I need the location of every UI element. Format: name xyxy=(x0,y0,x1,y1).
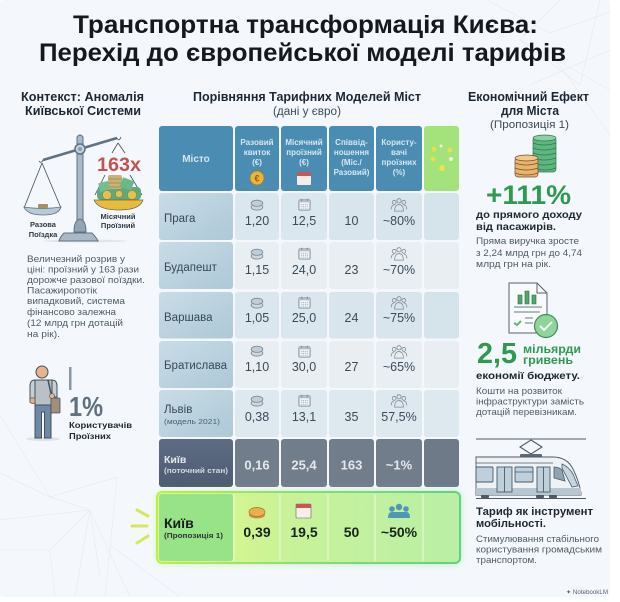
stat: +111%: Пряма виручка зросте xyxy=(476,236,579,247)
text block: context: випадковий, система xyxy=(27,296,126,307)
row: Warsaw: 1,05 xyxy=(245,311,269,325)
row: Budapest: Будапешт xyxy=(164,262,218,274)
stat: 2.5 billion: мільярди xyxy=(523,342,581,356)
row: Bratislava: 27 xyxy=(345,360,358,374)
stat: 2.5 billion xyxy=(476,338,584,418)
table header row: (€) xyxy=(299,158,309,167)
heading: context: Контекст: Аномалія xyxy=(21,90,144,104)
table header row: проїзних xyxy=(381,158,417,167)
text block: context: на рік). xyxy=(27,329,60,340)
row: Prague: 12,5 xyxy=(292,214,316,228)
row: Prague: ~80% xyxy=(383,214,415,228)
icon: scales with 163x: Місячний xyxy=(101,212,136,221)
table header row: Співвід- xyxy=(335,138,368,147)
table header row: Користу- xyxy=(381,138,417,147)
stat: +111%: від пасажирів. xyxy=(476,221,556,233)
table header row: проїзний xyxy=(286,148,322,157)
text block: context xyxy=(27,254,145,340)
heading: comparison xyxy=(193,90,421,118)
text block: mobility: мобільності. xyxy=(476,518,546,530)
table header row: вачі xyxy=(391,148,407,157)
row: Kyiv proposal: (Пропозиція 1) xyxy=(164,531,224,540)
icon: budget document xyxy=(509,283,558,338)
row: Kyiv proposal: ~50% xyxy=(381,524,418,540)
table header row xyxy=(159,126,459,191)
row: Kyiv current xyxy=(159,439,459,487)
table header row: ношення xyxy=(334,148,369,157)
stat: +111% xyxy=(476,180,582,270)
icon: scales with 163x: Поїздка xyxy=(29,230,58,239)
text block: mobility: Тариф як інструмент xyxy=(476,506,594,518)
table header row: € xyxy=(254,174,260,184)
text block: context: (12 млрд грн дотацій xyxy=(27,318,123,329)
stat: 2.5 billion: гривень xyxy=(523,353,573,367)
row: Warsaw: Варшава xyxy=(164,312,213,324)
stat: 2.5 billion: 2,5 xyxy=(477,338,517,370)
stat: 1 percent users: 1% xyxy=(69,391,103,422)
row: Warsaw xyxy=(159,292,459,338)
stat: 2.5 billion: інфраструктури замість xyxy=(476,396,584,408)
stat: 2.5 billion: економії бюджету. xyxy=(476,370,580,382)
row: Kyiv current: (поточний стан) xyxy=(164,466,229,475)
icon: scales with 163x xyxy=(24,135,143,242)
icon: commuter xyxy=(26,366,60,441)
heading: economic effect: для Міста xyxy=(501,104,560,118)
stat: +111%: млрд грн на рік. xyxy=(476,259,551,270)
row: Prague: Прага xyxy=(164,213,196,225)
row: Lviv xyxy=(159,390,459,437)
table header row: Разовий xyxy=(240,138,274,147)
table header row: (€) xyxy=(252,158,262,167)
row: Lviv: 0,38 xyxy=(245,410,269,424)
title xyxy=(39,11,566,67)
heading: economic effect: (Пропозиція 1) xyxy=(490,119,569,131)
stat: +111%: +111% xyxy=(486,180,571,210)
row: Lviv: 57,5% xyxy=(381,410,417,424)
icon: scales with 163x: Разова xyxy=(30,220,57,229)
row: Budapest: ~70% xyxy=(383,263,415,277)
heading: context: Київської Системи xyxy=(25,104,141,118)
heading: comparison: (дані у євро) xyxy=(273,106,341,118)
row: Bratislava: ~65% xyxy=(383,360,415,374)
watermark: ✦ NotebookLM xyxy=(566,589,608,596)
table header row: квиток xyxy=(244,148,271,157)
row: Bratislava xyxy=(159,341,459,388)
stat: 2.5 billion: дотацій перевізникам. xyxy=(476,407,577,418)
panel: comparison table xyxy=(132,90,460,563)
row: Kyiv proposal: 19,5 xyxy=(290,524,318,540)
table header row: (%) xyxy=(393,168,406,177)
stat: 1 percent users: Користувачів xyxy=(69,420,132,430)
text block: context: фінансово залежна xyxy=(27,307,117,318)
icon: coin stacks xyxy=(515,135,556,177)
text block: mobility: транспортом. xyxy=(476,555,537,566)
arrows: highlight rays xyxy=(132,510,148,543)
row: Prague: 10 xyxy=(345,214,358,228)
row: Lviv: (модель 2021) xyxy=(164,417,221,426)
icon: scales with 163x: 163x xyxy=(97,155,141,176)
table header row: Місто xyxy=(182,154,210,165)
row: Kyiv proposal: Київ xyxy=(164,515,194,531)
heading: economic effect xyxy=(468,90,589,131)
row: Prague xyxy=(159,193,459,240)
icon: scales with 163x: Проїзний xyxy=(101,221,135,230)
title: Перехід до європейської моделі тарифів xyxy=(39,39,566,67)
table header row: Разовий) xyxy=(334,168,370,177)
row: Budapest: 23 xyxy=(345,263,358,277)
stat: 1 percent users xyxy=(69,367,132,441)
row: Kyiv proposal xyxy=(157,492,460,563)
table header row: (Міс./ xyxy=(341,158,362,167)
row: Bratislava: Братислава xyxy=(164,360,228,372)
row: Kyiv current: ~1% xyxy=(386,458,413,472)
row: Kyiv current: 0,16 xyxy=(244,458,270,472)
text block: context: Пасажиропотік xyxy=(27,286,98,296)
stat: +111%: з 2,24 млрд грн до 4,74 xyxy=(476,248,582,259)
stat: 2.5 billion: Кошти на розвиток xyxy=(476,386,563,397)
row: Kyiv current: 25,4 xyxy=(291,458,317,472)
row: Kyiv current: 163 xyxy=(341,458,362,472)
row: Warsaw: 25,0 xyxy=(292,311,316,325)
row: Budapest: 24,0 xyxy=(292,263,316,277)
row: Kyiv current: Київ xyxy=(164,454,187,466)
row: Warsaw: 24 xyxy=(345,311,358,325)
row: Lviv: Львів xyxy=(164,404,192,416)
row: Prague: 1,20 xyxy=(245,214,269,228)
heading: context xyxy=(21,90,144,118)
row: Budapest xyxy=(159,242,459,289)
text block: mobility: Стимулювання стабільного xyxy=(476,534,599,545)
table header row: Місячний xyxy=(285,138,323,147)
panel: context xyxy=(21,90,145,441)
stat: +111%: до прямого доходу xyxy=(476,209,582,221)
heading: comparison: Порівняння Тарифних Моделей Міст xyxy=(193,90,421,104)
heading: economic effect: Економічний Ефект xyxy=(468,90,589,104)
title: Транспортна трансформація Києва: xyxy=(73,11,538,39)
row: Warsaw: ~75% xyxy=(383,311,415,325)
text block: context: дорожче разової поїздки. xyxy=(27,275,145,286)
text block: mobility: користування громадським xyxy=(476,544,602,556)
row: Bratislava: 30,0 xyxy=(292,360,316,374)
panel: economic effect xyxy=(468,90,602,566)
text block: mobility xyxy=(476,506,602,566)
row: Kyiv proposal: 50 xyxy=(344,524,359,540)
row: Bratislava: 1,10 xyxy=(245,360,269,374)
row: Lviv: 35 xyxy=(345,410,358,424)
text block: context: ціні: проїзний у 163 рази xyxy=(27,264,139,276)
row: Budapest: 1,15 xyxy=(245,263,269,277)
stat: 1 percent users: Проїзних xyxy=(69,431,111,441)
icon: tram xyxy=(476,439,586,498)
row: Kyiv proposal: 0,39 xyxy=(243,524,271,540)
row: Lviv: 13,1 xyxy=(292,410,316,424)
text block: context: Величезний розрив у xyxy=(27,254,125,265)
